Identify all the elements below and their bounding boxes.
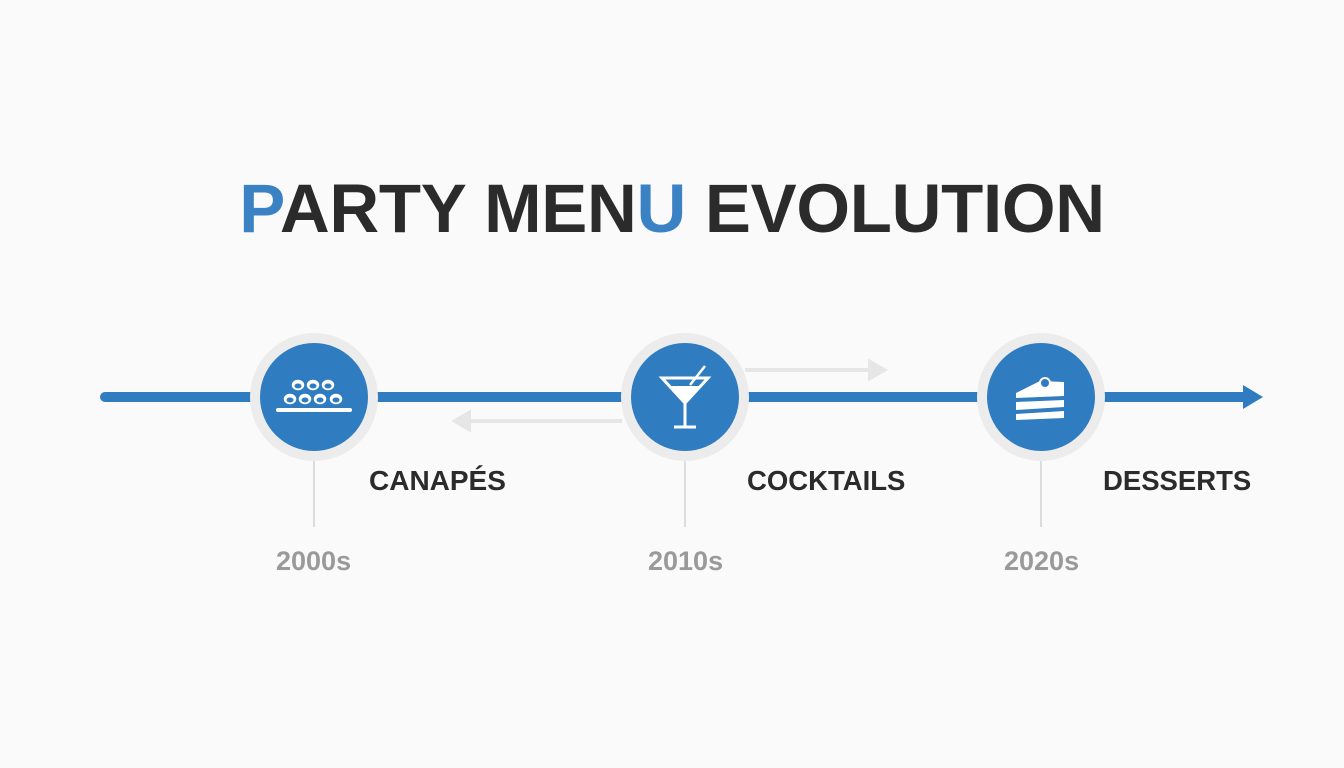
label: cocktails: COCKTAILS — [747, 465, 905, 496]
label: canapes: CANAPÉS — [369, 465, 506, 496]
year: 2000s: 2000s — [276, 546, 351, 576]
label: desserts: DESSERTS — [1103, 465, 1251, 496]
connector lines — [314, 455, 1041, 527]
title: PARTY MENU EVOLUTION — [239, 170, 1105, 247]
faint arrows — [455, 362, 884, 429]
main arrow line — [105, 385, 1263, 409]
icon: canapes — [250, 333, 378, 461]
icon: cake — [977, 333, 1105, 461]
year: 2010s: 2010s — [648, 546, 723, 576]
icon: cocktail — [621, 333, 749, 461]
year: 2020s: 2020s — [1004, 546, 1079, 576]
